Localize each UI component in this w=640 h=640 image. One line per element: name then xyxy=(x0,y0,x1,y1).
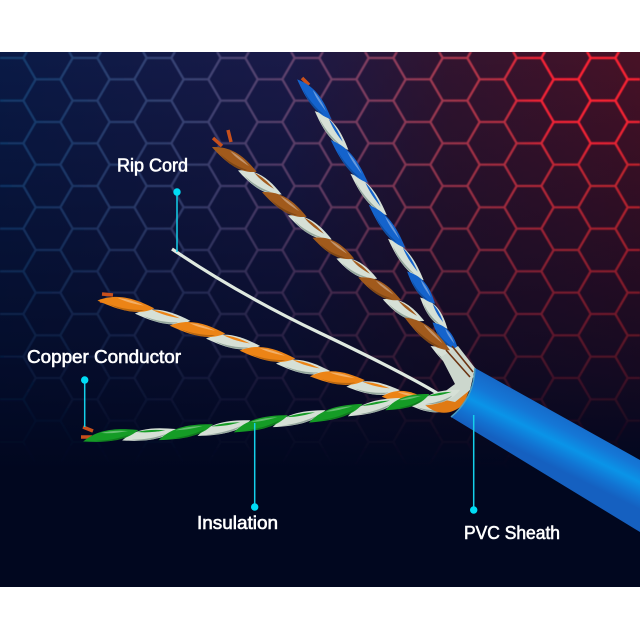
hexagon pattern xyxy=(0,52,640,447)
leader: PVC sheath xyxy=(470,415,477,514)
label: PVC sheath: PVC Sheath xyxy=(464,523,560,543)
rip cord xyxy=(172,249,437,393)
leader: rip cord xyxy=(173,188,181,252)
wire bundle at sheath opening xyxy=(425,346,475,413)
label: rip cord: Rip Cord xyxy=(117,156,188,176)
PVC sheath xyxy=(451,368,640,532)
label: copper conductor: Copper Conductor xyxy=(27,347,181,367)
orange twisted pair xyxy=(97,288,454,419)
green twisted pair xyxy=(81,388,462,442)
label: insulation: Insulation xyxy=(197,513,278,533)
blue twisted pair xyxy=(296,74,470,376)
leader: copper conductor xyxy=(81,376,88,427)
brown twisted pair xyxy=(211,130,476,386)
leader: insulation xyxy=(251,423,258,511)
